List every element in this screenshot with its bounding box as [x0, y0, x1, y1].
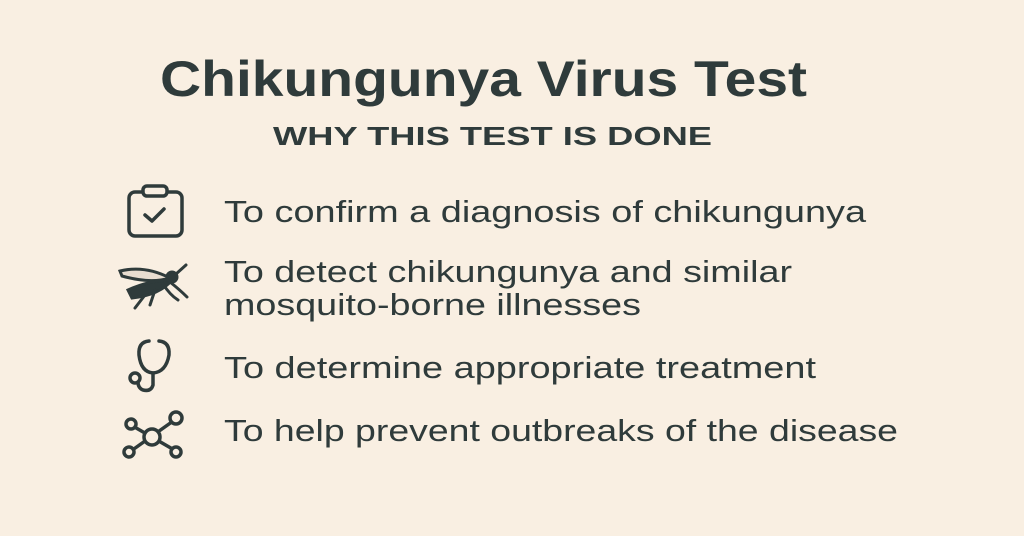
icon: network: [124, 412, 182, 457]
item 2: mosquito-borne illnesses: [224, 287, 641, 322]
text: item 1: To confirm a diagnosis of chikungunya: [224, 194, 867, 229]
text: item 2: To detect chikungunya and similar: [224, 254, 792, 289]
text: item 3: To determine appropriate treatment: [224, 350, 816, 385]
item 1: [129, 186, 867, 236]
text: item 4: To help prevent outbreaks of the disease: [224, 413, 898, 448]
icon: clipboard: [129, 186, 182, 236]
item 2: [120, 254, 792, 322]
title: Chikungunya Virus Test: [160, 51, 807, 107]
icon: stethoscope: [130, 341, 169, 390]
item 4: [124, 412, 898, 457]
item 3: [130, 341, 816, 390]
icon: mosquito: [120, 265, 187, 308]
subtitle: WHY THIS TEST IS DONE: [273, 121, 712, 151]
